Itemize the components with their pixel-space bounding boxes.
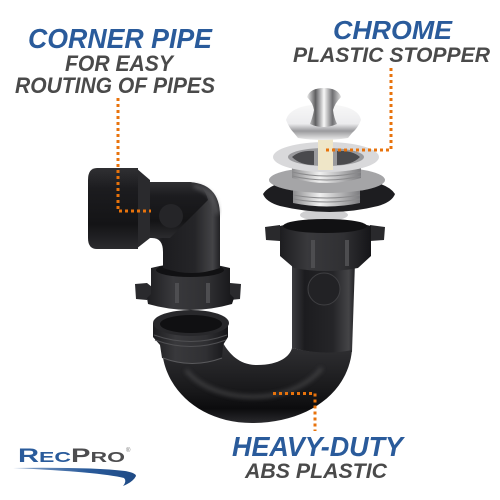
logo: RecPro: [13, 446, 136, 486]
heading: heavy-duty: HEAVY-DUTY: [232, 431, 405, 462]
slip nut: elbow: [135, 263, 241, 310]
logo wordmark: R EC P RO: [18, 446, 126, 467]
logo swoosh: [13, 468, 136, 486]
corner elbow pipe: [88, 168, 220, 273]
black gasket: [263, 182, 395, 212]
U bend: [163, 343, 352, 423]
text: routing of pipes: ROUTING OF PIPES: [15, 73, 215, 98]
stopper knob: [307, 88, 341, 127]
text: abs plastic: ABS PLASTIC: [244, 460, 388, 483]
right vertical pipe: [292, 262, 355, 353]
heading: corner pipe: CORNER PIPE: [28, 23, 213, 54]
chrome tail below gasket: [300, 209, 348, 221]
socket: [88, 168, 138, 249]
threaded inlet: [153, 323, 228, 363]
slip nut: trap top: [265, 219, 385, 271]
callout line: heavy-duty: [273, 394, 315, 431]
cream stem: [318, 138, 333, 170]
text: for easy: FOR EASY: [65, 51, 175, 76]
callout line: chrome stopper: [324, 68, 391, 150]
chrome stopper assembly: [263, 88, 395, 221]
lower threads: [293, 188, 360, 206]
chrome flange: [273, 142, 379, 172]
callout line: corner pipe: [118, 98, 151, 211]
stopper cap: [286, 104, 361, 140]
grey washer: [269, 167, 385, 193]
heading: chrome: CHROME: [333, 15, 453, 45]
logo registered mark: ®: [126, 447, 131, 454]
upper threads: [292, 165, 361, 183]
socket taper: [136, 168, 150, 249]
text: plastic stopper: PLASTIC STOPPER: [293, 44, 491, 67]
elbow body and leg: [148, 182, 220, 273]
J-bend trap: [153, 262, 355, 423]
pipe stamp: [308, 273, 340, 305]
